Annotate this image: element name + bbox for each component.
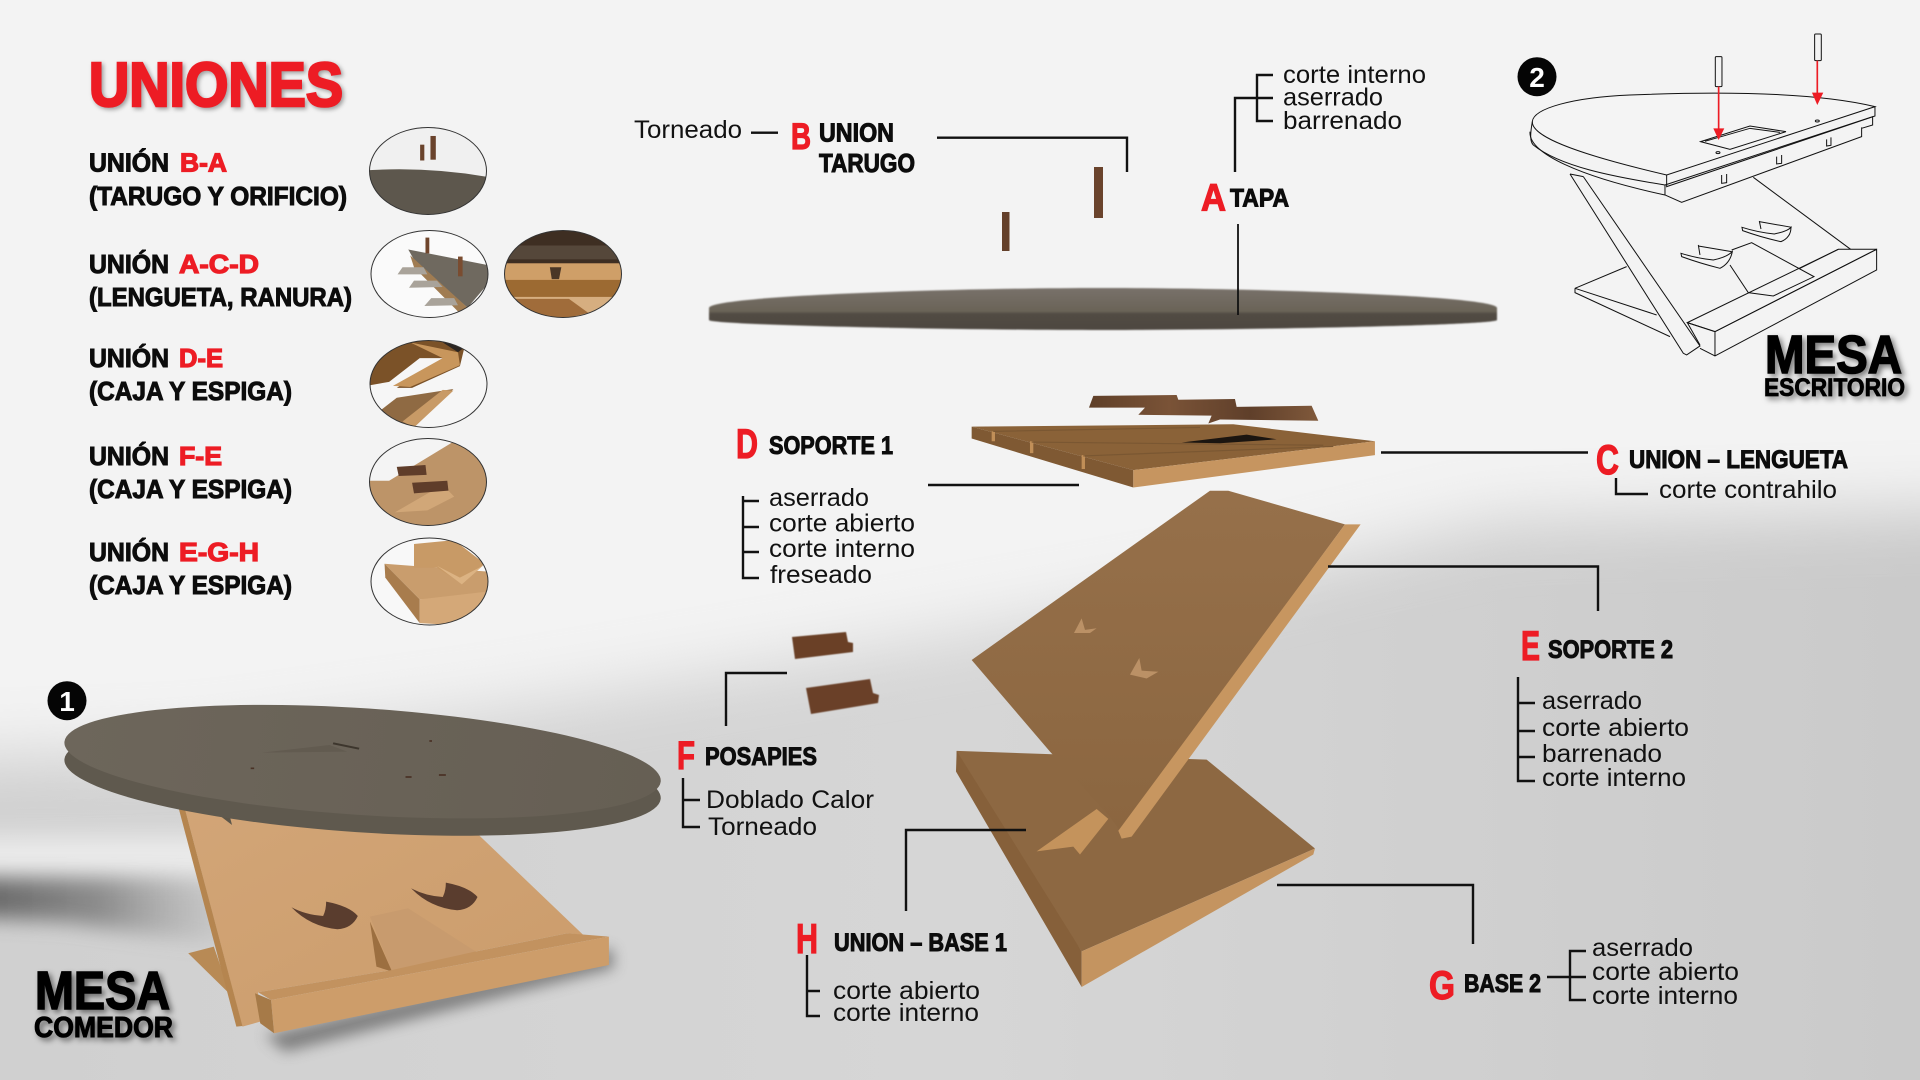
- process list A: corte interno: [1283, 61, 1426, 89]
- label C: C: [1596, 436, 1619, 483]
- panel: tapa A: [709, 61, 1497, 330]
- label D: D: [736, 420, 758, 467]
- label A: TAPA: [1230, 185, 1289, 213]
- union D-E label: (CAJA Y ESPIGA): [89, 376, 292, 406]
- union A-C-D label: A-C-D: [179, 249, 259, 279]
- label E: corte abierto: [1542, 714, 1689, 742]
- table render: [58, 688, 667, 1033]
- label A: [1201, 178, 1289, 220]
- label G: corte interno: [1592, 982, 1738, 1010]
- leader G: [1277, 885, 1473, 944]
- union D-E label: D-E: [179, 343, 223, 373]
- union D-E label: [89, 343, 292, 406]
- label B: UNION: [819, 120, 894, 148]
- label F: POSAPIES: [705, 743, 817, 771]
- panel: exploded supports: [906, 395, 1598, 987]
- label D: SOPORTE 1: [769, 432, 893, 460]
- label D: [736, 420, 915, 589]
- process list A: [1283, 61, 1426, 135]
- heading: mesa escritorio: MESA: [1765, 325, 1902, 385]
- label E: barrenado: [1542, 740, 1662, 768]
- label D: aserrado: [769, 484, 869, 512]
- union A-C-D label: UNIÓN: [89, 249, 169, 279]
- label D: corte abierto: [769, 510, 915, 538]
- heading: mesa comedor: MESA: [35, 961, 170, 1021]
- badge 1: [48, 681, 86, 720]
- label H: UNION – BASE 1: [834, 929, 1007, 957]
- panel: lista de uniones: [89, 120, 630, 635]
- union B-A label: UNIÓN: [89, 148, 169, 178]
- support E: [972, 491, 1361, 839]
- label G: [1429, 934, 1739, 1010]
- dowels: [1002, 167, 1103, 251]
- label A: A: [1201, 178, 1226, 220]
- panel: mesa comedor: [58, 688, 667, 1052]
- label E: [1518, 622, 1689, 792]
- label H: corte interno: [833, 999, 979, 1027]
- union F-E label: F-E: [179, 441, 222, 471]
- label G: G: [1429, 964, 1455, 1008]
- posapies pieces: [726, 632, 879, 726]
- union E-G-H label: (CAJA Y ESPIGA): [89, 570, 292, 600]
- label G: aserrado: [1592, 934, 1693, 962]
- leader H: [906, 830, 1026, 911]
- icon: detail D-E: [370, 340, 488, 428]
- union E-G-H label: UNIÓN: [89, 537, 169, 567]
- label F: Doblado Calor: [706, 786, 874, 814]
- leader D: [928, 484, 1079, 486]
- union F-E label: UNIÓN: [89, 441, 169, 471]
- title: UNIONES: [89, 51, 343, 120]
- label C: corte contrahilo: [1659, 476, 1837, 504]
- label C: UNION – LENGUETA: [1629, 446, 1848, 474]
- label E: aserrado: [1542, 687, 1642, 715]
- union E-G-H label: E-G-H: [179, 537, 259, 567]
- panel: tarugo B: [634, 116, 1127, 251]
- base G: [956, 751, 1315, 987]
- process list A: barrenado: [1283, 107, 1402, 135]
- label F: Torneado: [708, 813, 817, 841]
- leader E: [1328, 566, 1598, 611]
- line drawing: mesa escritorio: [1530, 34, 1877, 356]
- union F-E label: (CAJA Y ESPIGA): [89, 474, 292, 504]
- label B: Torneado: [634, 116, 742, 144]
- leader C: [1381, 451, 1588, 454]
- label H: H: [796, 915, 818, 962]
- label E: SOPORTE 2: [1548, 636, 1673, 664]
- label B: TARUGO: [819, 150, 915, 178]
- label H: [796, 915, 1007, 1027]
- heading: mesa escritorio: ESCRITORIO: [1764, 374, 1905, 402]
- badge 1: 1: [59, 686, 75, 717]
- label G: BASE 2: [1464, 970, 1541, 998]
- dowels and arrows: [1713, 34, 1823, 140]
- table shadow: [265, 948, 614, 1052]
- label B: [634, 116, 915, 178]
- badge 2: 2: [1529, 62, 1545, 93]
- icon: detail A-C-D exterior: [370, 230, 488, 318]
- union B-A label: B-A: [180, 148, 227, 178]
- heading: mesa comedor: [34, 961, 173, 1044]
- union D-E label: UNIÓN: [89, 343, 169, 373]
- icon: detail B-A: [369, 127, 487, 215]
- label E: corte interno: [1542, 764, 1686, 792]
- label F: [677, 734, 874, 841]
- support D: [972, 424, 1375, 488]
- label D: corte interno: [769, 535, 915, 563]
- label B: B: [791, 116, 811, 157]
- badge 2: [1518, 57, 1556, 96]
- tabletop side view: [709, 288, 1497, 330]
- icon: detail A-C-D corte: [504, 230, 622, 318]
- union A-C-D label: (LENGUETA, RANURA): [89, 282, 352, 312]
- process list A: aserrado: [1283, 84, 1383, 112]
- label C: [1596, 436, 1848, 504]
- label D: freseado: [770, 561, 872, 589]
- union B-A label: (TARUGO Y ORIFICIO): [89, 181, 347, 211]
- union E-G-H label: [89, 537, 292, 600]
- label E: E: [1521, 622, 1540, 669]
- label G: corte abierto: [1592, 958, 1739, 986]
- icon: detail E-G-H: [370, 538, 488, 626]
- union B-A label: [89, 148, 347, 211]
- union A-C-D label: [89, 249, 352, 312]
- tongue piece C: [1089, 395, 1318, 423]
- icon: detail F-E: [369, 438, 487, 526]
- label H: corte abierto: [833, 977, 980, 1005]
- union F-E label: [89, 441, 292, 504]
- label F: F: [677, 734, 695, 778]
- heading: mesa comedor: COMEDOR: [34, 1012, 173, 1044]
